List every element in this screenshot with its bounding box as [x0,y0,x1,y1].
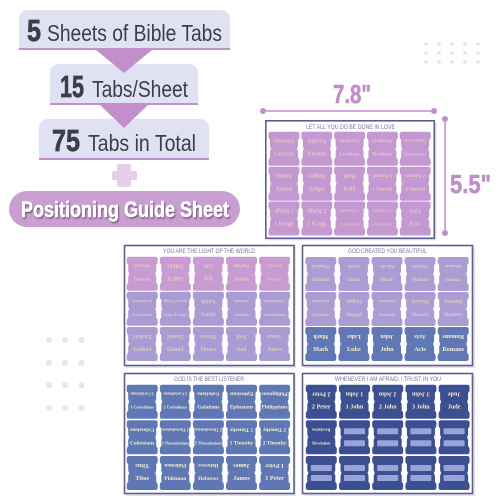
tab rows: sheet 5: 2 Peter [312,404,331,411]
decorative dots: left [46,337,84,411]
dimension: height 5.5 inches [442,116,491,236]
tab rows: sheet 2: Job [204,263,213,270]
banner: 5 sheets of bible tabs [19,10,230,50]
tab rows: sheet 4: Philemon [164,476,186,482]
tab rows: sheet 2: Hosea [200,333,216,340]
tab rows: sheet 1: 2 Kings [307,220,327,228]
tab rows: sheet 2: Amos [267,333,282,340]
tab rows: sheet 1: 2 Samuel [405,187,426,193]
tab rows: sheet 4: Colossians [130,440,154,446]
tab rows: sheet 1: Ezra [410,220,421,228]
tab rows: sheet 2: Psalms [234,263,249,269]
tab rows: sheet 1: Ezra [409,208,421,214]
tab rows: sheet 2: Esther [167,276,183,283]
dimension: width 7.8 inches: 7.8" [333,79,371,109]
tab rows: sheet 4: Titus [135,475,150,482]
tab rows: sheet 2: Daniel [167,333,184,340]
tab rows: sheet 4: 1 Thessalonians [162,440,189,445]
tab rows: sheet 1: 1 Kings [274,220,294,228]
tab rows: sheet 1: Numbers [373,138,392,144]
banner: 75 tabs in total [39,119,209,160]
tab rows: sheet 2: Isaiah [200,298,216,305]
tab rows: sheet 4: 1 Thessalonians [161,427,189,432]
tab rows: sheet 3: Habakkuk [445,277,461,282]
tab rows: sheet 1: Judges [308,173,325,180]
tab rows: sheet 3: Mark [313,346,329,353]
tab rows: sheet 4: Philippians [262,405,288,411]
tab rows: sheet 1: 1 Samuel [372,173,393,179]
tab rows: sheet 4 [127,385,290,490]
tab rows: sheet 1: Leviticus [340,138,360,144]
panel: sheet 1 let all you do be done in love: LET ALL YOU DO BE DONE IN LOVE [306,125,395,131]
tab rows: sheet 3: Obadiah [312,277,330,283]
tab rows: sheet 4: Philemon [164,462,186,468]
dimension: height 5.5 inches: 5.5" [450,169,491,199]
panel: sheet 4 god is the best listener [124,374,296,496]
tab rows: sheet 3: Jonah [347,263,360,269]
tab rows: sheet 1: Exodus [307,138,326,145]
tab rows: sheet 5: Jude [448,404,461,411]
tab rows: sheet 1: Leviticus [340,152,360,158]
tab rows: sheet 4: Philippians [262,391,288,397]
panel: sheet 5 whenever i am afraid i trust in you: WHENEVER I AM AFRAID, I TRUST IN YOU [335,377,441,383]
arrow: second down triangle [100,105,148,128]
tab rows: sheet 3: Mark [313,333,328,340]
tab rows: sheet 4: Ephesians [230,391,253,397]
tab rows: sheet 2: Ezekiel [133,346,152,353]
tab rows: sheet 3: Haggai [346,298,362,304]
tab rows: sheet 5: 2 John [378,391,397,398]
tab rows: sheet 5: Jude [447,391,460,398]
tab rows: sheet 1: 1 Chronicles [339,222,360,226]
dimension: width 7.8 inches [260,79,437,114]
banner: 5 sheets of bible tabs: 5 [27,13,41,48]
tab rows: sheet 3: Zechariah [379,312,395,317]
tab rows: sheet 4: Hebrews [198,476,219,482]
tab rows: sheet 2: Hosea [201,346,216,353]
tab rows: sheet 2: Lamentations [263,299,285,304]
tab rows: sheet 4: Ephesians [230,405,253,411]
tab rows: sheet 2: Psalms [234,277,249,283]
tab rows: sheet 3: Micah [380,263,394,269]
tab rows: sheet 3: Jonah [348,277,360,283]
tab rows: sheet 2: Ecclesiastes [133,312,152,317]
tab rows: sheet 4: 1 Peter [265,475,284,482]
tab rows: sheet 2: Ezekiel [133,333,151,340]
tab rows: sheet 4: 2 Timothy [262,426,286,432]
tab rows: sheet 2: Ecclesiastes [132,299,152,304]
tab rows: sheet 1: 2 Chronicles [372,222,393,226]
tab rows: sheet 1: 1 Samuel [372,187,393,193]
tab rows: sheet 3: Acts [414,333,426,340]
tab rows: sheet 4: 2 Thessalonians [194,427,222,432]
tab rows: sheet 3: Malachi [411,312,429,318]
panel: sheet 5 whenever i am afraid i trust in you [302,374,475,496]
tab rows: sheet 3: Luke [347,333,361,340]
banner: 75 tabs in total: 75 [52,123,80,158]
tab rows: sheet 1: Deuteronomy [404,139,426,144]
tab rows: sheet 1: Exodus [308,151,327,158]
tab rows: sheet 2: Proverbs [267,264,282,269]
tab rows: sheet 2: Jeremiah [234,312,249,317]
tab rows: sheet 1: 2 Kings [307,208,327,214]
panel: sheet 4 god is the best listener: GOD IS THE BEST LISTENER [174,377,245,383]
tab rows: sheet 5: 2 Peter [312,391,331,398]
tab rows: sheet 5: 3 John [411,391,430,398]
tab rows: sheet 1: Joshua [276,186,293,193]
tab rows: sheet 4: 1 Timothy [229,426,253,432]
panel: sheet 3 god created you beautiful: GOD CREATED YOU BEAUTIFUL [348,249,428,255]
tab rows: sheet 5 [306,385,470,490]
panel: sheet 2 you are the light of the world: YOU ARE THE LIGHT OF THE WORLD [163,249,256,255]
tab rows: sheet 1: Numbers [373,152,392,158]
tab rows: sheet 2: Joel [236,333,246,340]
tab rows: sheet 3: Haggai [346,312,362,318]
tab rows: sheet 5: 3 John [412,404,430,411]
tab rows: sheet 1: Ruth [343,173,356,180]
tab rows: sheet 2: Nehemiah [134,264,150,269]
tab rows: sheet 2: Proverbs [267,277,282,282]
tab rows: sheet 4: 1 Timothy [230,440,254,446]
tab rows: sheet 4: 2 Thessalonians [195,440,222,445]
tab rows: sheet 4: Titus [135,462,149,469]
pill: positioning guide sheet: Positioning Guide Sheet [21,197,230,222]
tab rows: sheet 3: Matthew [444,312,463,318]
tab rows: sheet 5: Revelation [311,427,330,432]
tab rows: sheet 1: Deuteronomy [404,152,426,157]
panel: sheet 1 let all you do be done in love [266,121,436,240]
tab rows: sheet 2: Song of Songs [164,312,187,317]
tab rows: sheet 5: 1 John [345,391,363,398]
tab rows: sheet 1: 1 Kings [274,208,294,214]
tab rows: sheet 4: Galatians [197,391,219,397]
icon: plus sign [112,164,137,187]
tab rows: sheet 3: Nahum [411,263,428,269]
arrow: first down triangle [96,50,152,73]
tab rows: sheet 2: Esther [167,263,183,270]
banner: 15 tabs per sheet: Tabs/Sheet [92,76,188,102]
tab rows: sheet 4: 2 Corinthians [163,392,187,397]
tab rows: sheet 4: Galatians [197,405,219,411]
tab rows: sheet 2: Song of Songs [163,299,187,304]
pill: positioning guide sheet [9,191,240,227]
tab rows: sheet 1: Joshua [275,173,292,180]
tab rows: sheet 2: Nehemiah [134,277,150,282]
tab rows: sheet 4: 2 Timothy [263,440,287,446]
tab rows: sheet 1: Ruth [344,186,357,193]
tab rows: sheet 1: Judges [308,186,326,193]
tab rows: sheet 3: Obadiah [311,263,330,269]
tab rows: sheet 3: John [380,333,394,340]
panel: sheet 2 you are the light of the world [124,246,296,368]
banner: 15 tabs per sheet: 15 [60,69,84,104]
tab rows: sheet 4: James [233,475,250,482]
tab rows: sheet 3 [305,257,469,361]
tab rows: sheet 3: Micah [380,277,394,283]
tab rows: sheet 2: Joel [237,346,247,353]
tab rows: sheet 4: Colossians [130,426,154,432]
tab rows: sheet 3: Romans [442,346,465,353]
tab rows: sheet 3: John [380,346,394,353]
tab rows: sheet 1 [268,132,431,236]
panel: sheet 3 god created you beautiful [302,246,475,368]
banner: 5 sheets of bible tabs: Sheets of Bible Tabs [47,20,222,46]
tab rows: sheet 3: Luke [347,346,361,353]
tab rows: sheet 1: 2 Chronicles [372,208,393,214]
tab rows: sheet 4: 1 Peter [265,462,284,469]
tab rows: sheet 2 [127,257,290,361]
tab rows: sheet 4: James [233,462,250,469]
tab rows: sheet 3: Acts [414,346,427,353]
tab rows: sheet 3: Matthew [444,298,463,304]
decorative dots: top right [424,42,480,64]
tab rows: sheet 2: Amos [267,346,283,353]
tab rows: sheet 3: Habakkuk [445,264,461,269]
tab rows: sheet 4: Hebrews [198,462,219,468]
tab rows: sheet 5: 1 John [346,404,364,411]
tab rows: sheet 2: Isaiah [201,311,217,318]
tab rows: sheet 4: 2 Corinthians [164,405,187,410]
tab rows: sheet 2: Daniel [167,346,184,353]
tab rows: sheet 1: 2 Samuel [405,173,425,179]
tab rows: sheet 2: Job [204,276,213,283]
tab rows: sheet 3: Malachi [411,298,429,304]
tab rows: sheet 3: Zephaniah [312,299,329,304]
banner: 75 tabs in total: Tabs in Total [88,130,196,156]
tab rows: sheet 3: Zechariah [379,299,395,304]
tab rows: sheet 3: Romans [442,333,464,340]
tab rows: sheet 2: Jeremiah [234,299,249,304]
tab rows: sheet 1: Genesis [274,151,294,158]
banner: 15 tabs per sheet [50,64,198,105]
tab rows: sheet 3: Nahum [412,277,429,283]
tab rows: sheet 2: Lamentations [264,312,286,317]
tab rows: sheet 4: 1 Corinthians [130,392,154,397]
tab rows: sheet 5: 2 John [379,404,397,411]
tab rows: sheet 3: Zephaniah [312,312,329,317]
tab rows: sheet 5: Revelation [312,440,331,445]
tab rows: sheet 1: 1 Chronicles [339,208,360,214]
tab rows: sheet 4: 1 Corinthians [130,405,154,410]
tab rows: sheet 1: Genesis [274,138,294,145]
